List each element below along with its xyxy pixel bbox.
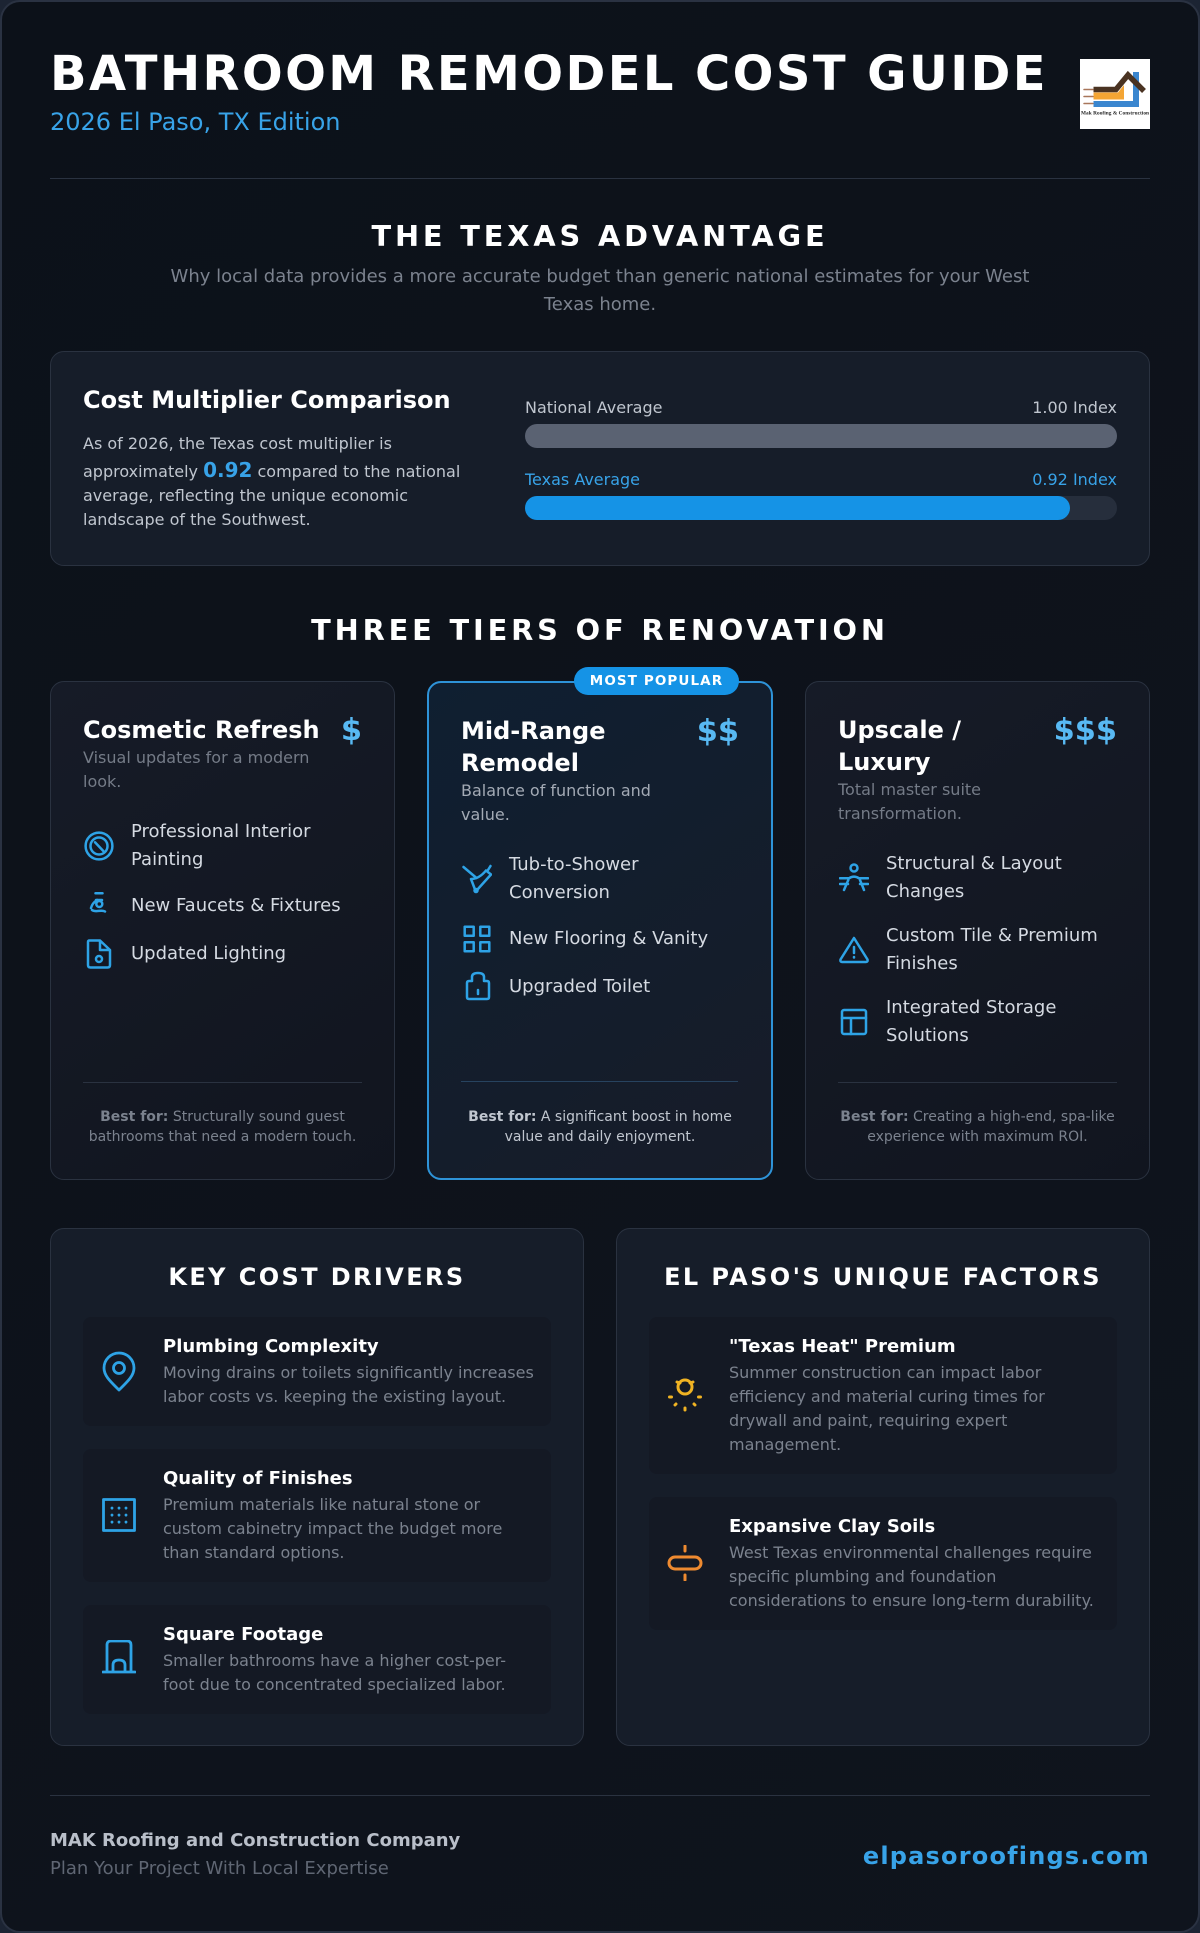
icon: toilet xyxy=(466,972,490,1000)
driver: square footage: Square Footage xyxy=(163,1624,323,1645)
footer tagline: Plan Your Project With Local Expertise xyxy=(50,1858,389,1879)
factor: clay soils xyxy=(649,1497,1117,1630)
best for xyxy=(89,1109,356,1145)
icon: target xyxy=(84,831,114,861)
factor: texas heat xyxy=(649,1317,1117,1474)
panel: cost multiplier xyxy=(50,351,1150,566)
badge: most popular: MOST POPULAR xyxy=(590,673,723,689)
bar: national xyxy=(525,398,1117,448)
icon: shower xyxy=(462,864,492,894)
panel: cosmetic refresh: look. xyxy=(83,772,121,791)
panel: cosmetic refresh: Professional Interior xyxy=(131,821,311,842)
panel: upscale luxury: Custom Tile & Premium xyxy=(886,925,1098,946)
comparison text xyxy=(83,434,460,529)
panel: cosmetic refresh: $ xyxy=(341,713,362,748)
panel: upscale luxury: Total master suite xyxy=(838,780,981,799)
heading: KEY COST DRIVERS xyxy=(168,1263,466,1291)
bar: texas: 0.92 Index xyxy=(1032,470,1117,489)
icon: document xyxy=(86,939,112,969)
panel: mid-range remodel: New Flooring & Vanity xyxy=(509,928,708,949)
panel: upscale luxury: Luxury xyxy=(838,748,930,776)
factor: texas heat: Summer construction can impact labor xyxy=(729,1363,1041,1382)
footer website: elpasoroofings.com xyxy=(863,1842,1150,1870)
icon: pin xyxy=(102,1352,136,1392)
panel: mid-range remodel: Upgraded Toilet xyxy=(509,976,650,997)
driver: finishes: custom cabinetry impact the budget more xyxy=(163,1519,502,1538)
best for: Best for: Creating a high-end, spa-like xyxy=(840,1109,1115,1125)
panel: cosmetic refresh: Painting xyxy=(131,849,203,870)
panel: upscale luxury: $$$ xyxy=(1054,713,1117,748)
panel: cosmetic refresh xyxy=(50,681,395,1180)
panel: mid-range remodel: Balance of function and xyxy=(461,781,651,800)
intro text: Texas home. xyxy=(544,294,656,315)
panel: mid-range remodel: value. xyxy=(461,805,510,824)
best for: experience with maximum ROI. xyxy=(867,1129,1088,1145)
panel: cosmetic refresh: Cosmetic Refresh xyxy=(83,716,320,744)
panel: upscale luxury: Finishes xyxy=(886,953,958,974)
factor: texas heat: "Texas Heat" Premium xyxy=(729,1336,956,1357)
icon: soil xyxy=(668,1545,702,1581)
icon: grid xyxy=(463,926,491,952)
intro text: Why local data provides a more accurate budget than generic national estimates for your West xyxy=(171,266,1029,287)
logo xyxy=(1080,59,1150,129)
bar: texas: Texas Average xyxy=(525,470,640,489)
driver: finishes xyxy=(83,1449,551,1582)
heading: the texas advantage: THE TEXAS ADVANTAGE xyxy=(371,219,829,253)
heading: EL PASO'S UNIQUE FACTORS xyxy=(664,1263,1102,1291)
best for xyxy=(468,1109,732,1145)
factor: texas heat: management. xyxy=(729,1435,841,1454)
driver: square footage: foot due to concentrated specialized labor. xyxy=(163,1675,506,1694)
comparison heading: Cost Multiplier Comparison xyxy=(83,386,451,414)
best for: Best for: A significant boost in home xyxy=(468,1109,732,1125)
icon: structure xyxy=(839,863,869,892)
factor: clay soils: Expansive Clay Soils xyxy=(729,1516,935,1537)
panel: mid-range remodel: Mid-Range xyxy=(461,717,605,745)
bar: texas xyxy=(524,470,1117,520)
panel: mid-range remodel xyxy=(427,681,773,1180)
panel: mid-range remodel: $$ xyxy=(697,714,739,749)
panel: cosmetic refresh: Updated Lighting xyxy=(131,943,286,964)
title: BATHROOM REMODEL COST GUIDE xyxy=(50,46,1048,102)
panel: mid-range remodel: Tub-to-Shower xyxy=(509,854,639,875)
bar: national: National Average xyxy=(525,398,662,417)
badge: most popular xyxy=(574,667,739,695)
best for: Best for: Structurally sound guest xyxy=(100,1109,345,1125)
driver: square footage xyxy=(83,1605,551,1714)
driver: plumbing: Plumbing Complexity xyxy=(163,1336,379,1357)
panel: mid-range remodel: Remodel xyxy=(461,749,579,777)
panel: cosmetic refresh: New Faucets & Fixtures xyxy=(131,895,341,916)
icon: warning xyxy=(839,936,869,964)
panel: upscale luxury: transformation. xyxy=(838,804,962,823)
intro text xyxy=(171,266,1029,315)
heading: three tiers: THREE TIERS OF RENOVATION xyxy=(311,613,889,647)
panel: mid-range remodel: Conversion xyxy=(509,882,610,903)
panel: upscale luxury: Upscale / xyxy=(838,716,961,744)
comparison text: landscape of the Southwest. xyxy=(83,510,311,529)
icon: tile grid xyxy=(102,1498,136,1532)
panel: upscale luxury: Solutions xyxy=(886,1025,969,1046)
comparison text: As of 2026, the Texas cost multiplier is xyxy=(83,434,392,453)
factor: clay soils: West Texas environmental challenges require xyxy=(729,1543,1092,1562)
panel: key cost drivers xyxy=(50,1228,584,1746)
driver: plumbing xyxy=(83,1317,551,1426)
comparison text: approximately 0.92 compared to the national xyxy=(83,458,460,482)
icon: sun xyxy=(668,1378,702,1412)
icon: doorway xyxy=(102,1640,136,1674)
best for: bathrooms that need a modern touch. xyxy=(89,1129,356,1145)
factor: clay soils: considerations to ensure long-term durability. xyxy=(729,1591,1094,1610)
panel: cosmetic refresh: Visual updates for a modern xyxy=(83,748,309,767)
factor: texas heat: efficiency and material curing times for xyxy=(729,1387,1045,1406)
panel: upscale luxury xyxy=(805,681,1150,1180)
icon: faucet xyxy=(90,892,106,913)
comparison text: average, reflecting the unique economic xyxy=(83,486,408,505)
panel: upscale luxury: Integrated Storage xyxy=(886,997,1056,1018)
factor: clay soils: specific plumbing and foundation xyxy=(729,1567,996,1586)
driver: finishes: than standard options. xyxy=(163,1543,345,1562)
driver: square footage: Smaller bathrooms have a higher cost-per- xyxy=(163,1651,506,1670)
best for xyxy=(840,1109,1115,1145)
panel: el paso factors xyxy=(616,1228,1150,1746)
driver: finishes: Premium materials like natural stone or xyxy=(163,1495,480,1514)
bar: national: 1.00 Index xyxy=(1032,398,1117,417)
driver: plumbing: Moving drains or toilets significantly increases xyxy=(163,1363,534,1382)
panel: upscale luxury: Changes xyxy=(886,881,964,902)
driver: plumbing: labor costs vs. keeping the existing layout. xyxy=(163,1387,506,1406)
best for: value and daily enjoyment. xyxy=(505,1129,695,1145)
logo: Mak Roofing & Construction xyxy=(1081,110,1149,116)
icon: layout xyxy=(840,1008,868,1036)
subtitle: 2026 El Paso, TX Edition xyxy=(50,108,340,136)
footer company: MAK Roofing and Construction Company xyxy=(50,1830,460,1851)
driver: finishes: Quality of Finishes xyxy=(163,1468,353,1489)
panel: upscale luxury: Structural & Layout xyxy=(886,853,1062,874)
factor: texas heat: drywall and paint, requiring expert xyxy=(729,1411,1007,1430)
